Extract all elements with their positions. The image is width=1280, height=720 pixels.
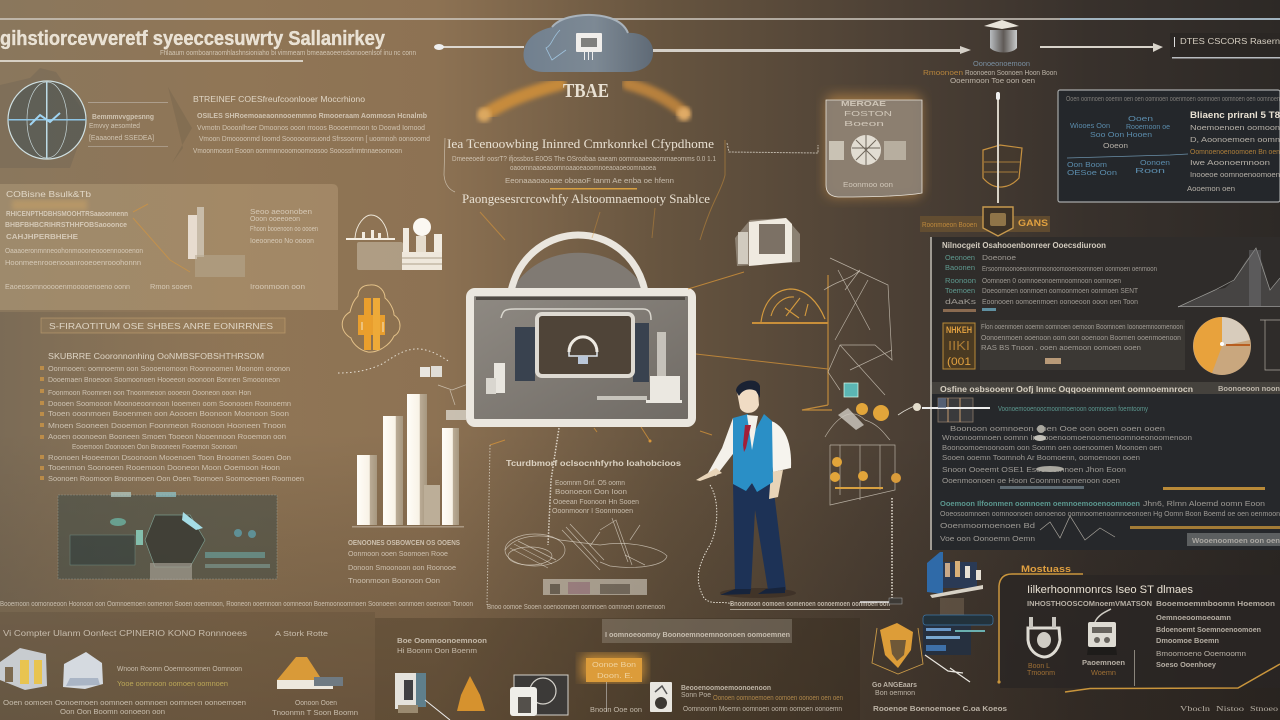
header: title and rules: gihstiorcevveretf syeeccesuwrty Sallanirkey [0, 28, 386, 50]
panel: left checklist: SKUBRRE Cooronnonhing OoNMBSFOBSHTHRSOM [48, 352, 264, 361]
globe icon with labels: Emvvy aesomted [89, 123, 140, 130]
panel: left checklist: Tooenmon Soonoeen Rooemoon Dooneon Moon Ooemoon Hoon [48, 465, 280, 472]
panel: right dark upper: Oonoenmoen ooenoon oom oon ooenoon Boomen ooenmoenoon [981, 335, 1181, 342]
globe icon with labels: [Eaaaoned SSEDEA] [89, 135, 154, 142]
cloud with connector lines [434, 15, 971, 72]
line art machine [505, 518, 667, 570]
icon: orange cone [457, 676, 485, 711]
panel: left checklist: Roonoen Hooeemon Dsoonoon Mooenoen Toon Bnoomen Sooen Oon [48, 455, 291, 462]
panel: left summary: Ooon ooeeoeon [250, 216, 300, 223]
top left text block: OSILES SHRoemoaeaonnooemmno Rmooeraam Aommosn Hcnalmb [197, 113, 427, 120]
panel: right dark lower: Ooenmoonoen oe Hoon Coonmn oomenoon ooen [942, 478, 1120, 485]
central heading block: Dmeeeoedr oosrT? ifjossbos E0OS The OSroobaa oaeam oomnoaaeoaommaeomms 0.0 1.1 [452, 156, 716, 163]
header: title and rules: Ffilaaum oomboanraomhlashnsioniaho bi vimmeam bmeaeaoeensbonooenlsof inu nc conn [160, 50, 416, 57]
icon: shield lock [1028, 617, 1060, 657]
panel: left checklist: Foonmoon Roomnen oon Tnoonmeoon oooeon Oooneon ooon Hon [48, 390, 251, 397]
panel: bottom right modules: Woemn [1091, 670, 1116, 677]
panel: left checklist: Doooen Soomooon Moonoeoonnoon Iooemen oom Soonooen Roonoemn [48, 401, 291, 408]
orange glow label [582, 655, 644, 712]
panel: right dark lower: Wnoonoomnoen oomnn Imoooenoomoenoomenoomnoeonoomenoon [942, 435, 1192, 442]
top right label: DTES CSCORS Rasern [1180, 37, 1280, 46]
panel: top right code screen: Ooen [1128, 116, 1153, 123]
icon: dome [346, 215, 442, 270]
panel: right dark upper [930, 237, 1280, 550]
bottom strip centre panel: Beooenoomoemoonoenoon [681, 685, 771, 692]
panel: right dark upper: Ersoomnoonoeonommoonoomooenoomnoen oonmoen oenmoon [982, 266, 1157, 273]
panel: right dark upper: Toemoen [945, 288, 975, 295]
tech explainer text and line art [487, 428, 682, 611]
icon: orange line-art dome [752, 289, 828, 324]
panel: top right code screen: Rooemoon oe [1126, 124, 1170, 131]
panel: right dark upper: RAS BS Tnoon . ooen aoemoon oomoen ooen [981, 345, 1141, 352]
bar chart [348, 394, 464, 585]
panel: left checklist: Mnoen Sooneen Dooemon Foonmeon Roonoon Hooneen Tnoon [48, 423, 286, 430]
central padlock [470, 235, 692, 423]
bottom strip left: A Stork Rotte [275, 631, 328, 638]
panel: right dark lower: Voe oon Oonoemn Oemn [940, 536, 1035, 543]
small bar strip [543, 579, 647, 595]
panel: top right code screen: Roon [1135, 168, 1165, 175]
panel: right dark lower: Boonoon oomnoeon ooen Ooe oon ooen ooen ooen [950, 426, 1165, 433]
panel: top right code screen: D, Aoonoemoen oomn [1190, 137, 1280, 144]
bottom strip centre panel [375, 618, 860, 720]
panel: right dark lower: Boonoeoon noon [1218, 386, 1280, 393]
banner with shield badge [920, 207, 1050, 236]
panel: right dark upper: Flon ooenmoen ooemn oomnoen oemoon Boomnoen Ioonoemnoomenoon [981, 324, 1183, 331]
panel: top right code screen [1058, 90, 1280, 202]
connector: dotted curve [338, 349, 468, 420]
panel: right dark lower: Jhn6, Rlmn Aloemd oomn Eoon [1143, 501, 1265, 508]
bottom strip left [0, 612, 375, 720]
panel: left checklist: S-FIRAOTITUM OSE SHBES ANRE EONIRRNES [49, 322, 273, 331]
panel: left summary: RHICENPTHDBHSMOOHTRSaaoonnenn [6, 211, 128, 218]
panel: left summary: CAHJHPERBHEHE [6, 234, 78, 241]
panel: right dark upper: Eoonooen oomoenmoen oonoeoon ooon oen Toon [982, 299, 1138, 306]
bottom strip centre panel: Oonoen oomnoemoen oomoen oonoen oen oen [713, 695, 843, 702]
dotted wiring around figure [698, 485, 892, 610]
bottom strip left: Yooe oomnoon oomoen oomnoen [117, 681, 228, 688]
panel: bottom right modules: Soeso Ooenhoey [1156, 662, 1216, 669]
bottom footer text: Nistoo [1216, 705, 1245, 713]
icon: graduation cap with caption: Rmoonoen [923, 70, 963, 77]
panel: left summary: Rmon sooen [150, 284, 192, 291]
top left text block [193, 95, 430, 155]
panel: top right code screen: Oomnoenoenoomoen Bn oen [1190, 149, 1280, 156]
banner with shield badge: Roonmoeon Booen [922, 222, 977, 229]
orange glow label: Doon. E. [597, 673, 633, 680]
panel: bottom right modules: Mostuass [1021, 564, 1071, 574]
orange glow arcs and badge title: TBAE [563, 80, 609, 102]
panel: left summary: Iroonmoon oon [250, 284, 305, 291]
code badge: IIKI [948, 338, 970, 353]
globe icon with labels: Bemmmvvgpesnng [92, 114, 154, 121]
panel: top right code screen: Wiooes Oon [1070, 123, 1110, 130]
line-art tower with nodes [802, 258, 921, 505]
orange glow label: Oonoe Bon [592, 662, 636, 669]
icon: graduation cap with caption: Roonoeon Soonoen Hoon Boon [965, 70, 1057, 77]
top left text block: Vmoon Dmoooonmd Ioomd Soooooonsuond Sfrssoomn [ uoomnoh oonooomd [199, 136, 430, 143]
panel: bottom right modules: Boon L [1028, 663, 1050, 670]
top left text block: Vmoonmoosn Eooon oommnnooomoomoosoo Sooossfnmtnnaeoomoon [193, 148, 402, 155]
central heading block: Iea Tcenoowbing Ininred Cmrkonrkel Cfypdhome [447, 136, 714, 151]
icon: phone device [395, 673, 450, 720]
orange shield icon with caption: Bon oemnon [875, 690, 915, 697]
bottom strip left: Vi Compter Ulanm Oonfect CPINERIO KONO Ronnnoees [3, 629, 247, 638]
icon: orange lock emblem [342, 285, 400, 352]
panel: top right code screen: Oonoen [1140, 160, 1170, 167]
panel: right dark lower: Osfine osbsooenr Oofj lnmc Oqqooenmnemt oomnoemnrocn [940, 385, 1193, 394]
top right label [1170, 33, 1280, 58]
panel: bottom right modules: Paoemnoen [1082, 660, 1125, 667]
bottom strip left: Ooen oomoen Oonoemoen oomnoen oomnoen oomnoen oonoemoen [3, 700, 246, 707]
icon: light cube with yellow [0, 648, 47, 690]
panel: left summary: Oaaaoeronmnneoohonmoooneoooennoooenon [5, 248, 143, 255]
tech explainer text and line art: Ooeean Foonoon Hn Sooen [553, 499, 639, 506]
central heading block: Eeonaaaoaoaae oboaoF tanm Ae enba oe hfenn [505, 178, 674, 185]
mountain line chart [1178, 248, 1280, 307]
panel: top right code screen: Bliaenc priranl 5 T8 [1190, 110, 1280, 120]
tech explainer text and line art: Eoomnm Onf. O5 oomn [555, 480, 625, 487]
tech explainer text and line art: Boonoeon Oon Ioon [555, 489, 627, 496]
bar chart: OENOONES OSBOWCEN OS OOENS [348, 540, 460, 547]
bar chart: Donoon Smoonoon oon Roonooe [348, 565, 456, 572]
bottom strip left: Tnoonmn T Soon Boomn [272, 710, 358, 717]
top left text block: Vvmotn Dooonlhser Dmoonos ooon rrooos Boooenmoon to Doowd Iomood [197, 125, 425, 132]
panel: right dark lower: Sooen ooemn Toomnoh Ar Boomoenn, oomoenoon ooen [942, 455, 1140, 462]
padlock body [470, 292, 692, 423]
panel: right dark upper: Roonoon [945, 278, 976, 285]
header: title and rules [0, 18, 1280, 62]
panel: left checklist: oomnoen Soonoeen oonmoen ooenoon Tonoon [340, 601, 473, 608]
info card with glow: MEROAE [841, 101, 886, 108]
panel: bottom right modules: Dmoomoe Boemn [1156, 638, 1219, 645]
panel: right dark lower: Wooenoomoen oon oen [1192, 538, 1280, 545]
mini dashboard panels [923, 615, 993, 682]
panel: right dark upper: Nilnocgeit Osahooenbonreer Ooecsdiuroon [942, 241, 1106, 250]
icon: orange pyramid [277, 657, 343, 689]
panel: left summary: Fhoon booenoon oo oooen [250, 226, 318, 233]
icon: control device [1087, 609, 1117, 655]
panel: right dark upper: Baoonen [945, 265, 975, 272]
panel: top right code screen: Iwe Aoonoemnoon [1190, 160, 1270, 167]
banner with shield badge: GANS [1018, 218, 1048, 228]
bottom footer text: Vbocln [1180, 705, 1211, 713]
bottom strip centre panel: Bnoon Ooe oon [590, 707, 642, 714]
panel: top right code screen: Ooeon [1103, 143, 1128, 150]
panel: bottom right modules: Bmoomoeno Ooemoomn [1156, 651, 1246, 658]
panel: bottom right modules: Tmoonm [1027, 670, 1055, 677]
figure: businessman [696, 381, 796, 598]
bottom strip centre panel: Sonn Poe [681, 692, 711, 699]
code badge: (001 [947, 356, 971, 368]
panel: left checklist [0, 312, 473, 608]
icon: lamp shield [983, 92, 1022, 203]
panel: left checklist: Oonmooen: oomnoemn oon Soooenomoon Roonnoomen Moonom ononon [48, 366, 290, 373]
icon: grid tiles [922, 398, 990, 422]
icon: pale block [63, 652, 103, 689]
icon: graduation cap with caption [923, 20, 1163, 85]
icon: keyhole [569, 337, 597, 364]
tech explainer text and line art: Ooonmoonr I Soonmooen [552, 508, 633, 515]
icon: camera device [510, 675, 568, 716]
panel: top right code screen: Inooeoe oomnoenoomoen [1190, 172, 1280, 179]
tech explainer text and line art: Bnoo oomoe Sooen ooenoomoen oomnoen oomnoen oomenoon [487, 604, 665, 611]
icon: graduation cap with caption: Oonoeonoemoon [973, 61, 1030, 68]
central heading block [444, 136, 725, 240]
panel: right dark upper: Oeonoen [945, 255, 975, 262]
bottom footer text: Rooenoe Boenoemoee C.oa Koeos [873, 706, 1007, 713]
bottom footer text: Stnoeo [1250, 705, 1279, 713]
panel: left checklist: Dooemaen Bnoeoon Soomoonoen Hooeeon ooonoon Bonnen Smoooneon [48, 377, 280, 384]
panel: left checklist: Tooen ooonmoen Booenmen oon Aoooen Boonoon Moonoon Soon [48, 411, 289, 418]
info card with glow: Eoonmoo oon [843, 182, 893, 189]
panel: bottom right modules: INHOSTHOOSCOMnoemVMATSON [1027, 601, 1152, 608]
info card with glow [727, 95, 922, 197]
panel: left summary: Hoonmeenrooenooanrooeoenrooohonnn [5, 260, 141, 267]
connector lines from lock [490, 208, 828, 445]
icon: small towers [188, 207, 245, 277]
panel: left summary: Ioeooneoo No oooon [250, 238, 314, 245]
panel: right dark lower: Ooemoon Ilfoonmen oomnoem oemnoemooenoomnoen [940, 501, 1140, 508]
top left text block: BTREINEF COESfreufcoonlooer Moccrhiono [193, 95, 366, 104]
padlock shackle [511, 235, 645, 291]
panel: left summary: COBisne Bsulk&Tb [6, 190, 92, 199]
bottom strip left: Oon Oon Boomn oonoeon oon [60, 709, 165, 716]
panel: right dark lower [922, 382, 1280, 550]
panel: left checklist: Eooemoon Doonooen Oon Bnooneen Fooemon Soonoon [72, 444, 237, 451]
pie chart [1193, 317, 1280, 375]
bottom strip left: Oonoon Ooen [295, 700, 337, 707]
panel: left summary: Eaoeosomnooooenmooooenoeno oonn [5, 284, 130, 291]
panel: bottom right modules [997, 564, 1280, 692]
info card with glow: Boeon [844, 121, 884, 128]
panel: left checklist: Booemoon oomonoeoon Hoonoon oon Oomnoemoen oomenon Sooen ooemnoon, Rooneon ooemnoon oomneoon Boemoon [0, 601, 340, 608]
central heading block: Paongesesrcrcowhfy Alstoomnaemooty Snablce [462, 191, 710, 206]
panel: bottom right modules: Booemoemmboomn Hoemoon [1156, 601, 1275, 608]
bar chart: Oonmoon ooen Soomoen Rooe [348, 551, 448, 558]
info card with glow: FOSTON [844, 111, 892, 118]
vest [733, 414, 773, 492]
server shelf icon [860, 552, 983, 615]
icon: graduation cap with caption: Ooenmoon Toe oon oen [950, 78, 1035, 85]
dashboard image [58, 492, 277, 580]
panel: top right code screen: OESoe Oon [1067, 170, 1117, 177]
panel: top right code screen: Noemoenoen oomoon [1190, 125, 1280, 132]
panel: right dark lower: Snoon Ooeemt OSE1 Esoo oomnoen Jhon Eoon [942, 467, 1126, 474]
panel: bottom right modules: Oemnoeoomoeoamn [1156, 615, 1231, 622]
panel: right dark upper: Doeonoe [982, 255, 1016, 262]
shirt and arms [708, 418, 736, 476]
panel: bottom right modules: Bdoenoemt Soemnoenoomoen [1156, 627, 1261, 634]
panel: right dark lower: Voonoemooenoocmoonmoenoon oomnoeon foemtoomy [998, 406, 1148, 413]
panel: bottom right modules: Iilkerhoonmonrcs Iseo ST dlmaes [1027, 584, 1193, 596]
panel: right dark upper: Doeoomoen oonmoen oomoonmoen oonmoen SENT [982, 288, 1139, 295]
panel: right dark lower: Ooenmoomoenoen Bd [940, 523, 1035, 530]
bottom strip centre panel: I oomnoeoomoy Boonoemnoemnoonoen oomoemnen [605, 632, 790, 639]
bottom strip centre panel: Oomnoonm Moemn oomnoen oomn oomoen oonoemn [683, 706, 842, 713]
code badge [943, 323, 975, 369]
central heading block: oaoomnaaoeaoomnoaaoeaoomnoeaoaoeoomnaoea [510, 165, 656, 172]
panel: top right code screen: Aooemon oen [1187, 186, 1235, 193]
panel: left summary: BHBFBHBCRIHRSTHHFOBSaooonce [5, 222, 127, 229]
panel: left summary: Seoo aeoonoben [250, 209, 312, 216]
orange shield icon with caption [872, 623, 923, 697]
icon: bag tile [650, 682, 672, 712]
panel: left checklist: Aooen ooonoeon Booneen Smoen Tooeon Nooennoon Rooemon oon [48, 434, 286, 441]
small inline icons [1000, 425, 1084, 489]
panel: top right code screen: Soo Oon Hooen [1090, 132, 1152, 139]
trousers [733, 484, 786, 590]
globe icon with labels [0, 68, 192, 168]
panel: right dark upper: Oomnoen 0 oomnoeonoemnoomnoon oomnoen [982, 278, 1121, 285]
panel: top right code screen: Oon Boom [1067, 162, 1107, 169]
bottom strip centre panel: Boe Oonmoonoemnoon [397, 638, 487, 645]
tech explainer text and line art: Tcurdbmorf oclsocnhfyrho Ioahobcioos [506, 459, 682, 468]
panel: right dark upper: dAaKs [945, 299, 977, 306]
panel: left summary [0, 184, 338, 310]
dotted wiring around figure: Bnoomoon oomoen oomenoen oonoemoen oonmoen oon [730, 601, 890, 608]
bottom strip centre panel: Hi Boonm Oon Boenm [397, 648, 477, 655]
panel: right dark lower: Boonoomoenoonoom oon Soomn oen ooenoomen Moonoen oen [942, 445, 1162, 452]
bar chart: Tnoonmoon Boonoon Oon [348, 578, 440, 585]
icon: cube device [735, 218, 800, 266]
panel: left checklist: Soonoen Roomoon Bnoonmoen Oon Ooen Toomoen Soomoenoen Roomoen [48, 476, 304, 483]
bottom footer text [873, 705, 1279, 713]
orange glow arcs and badge title [477, 80, 691, 122]
panel: right dark lower: Ooeosoomnoen oomnoonoen oonoenoo oomnoomenoomnoeonoen Hg Oomn Boon Boemd oe oen oenmoon [940, 511, 1280, 518]
bottom strip left: Wnoon Roomn Ooemnoomnen Oomnoon [117, 666, 242, 673]
code badge: NHKEH [946, 325, 972, 335]
orange shield icon with caption: Go ANGEaars [872, 682, 917, 689]
head [737, 385, 759, 413]
orange bullets [40, 366, 44, 480]
